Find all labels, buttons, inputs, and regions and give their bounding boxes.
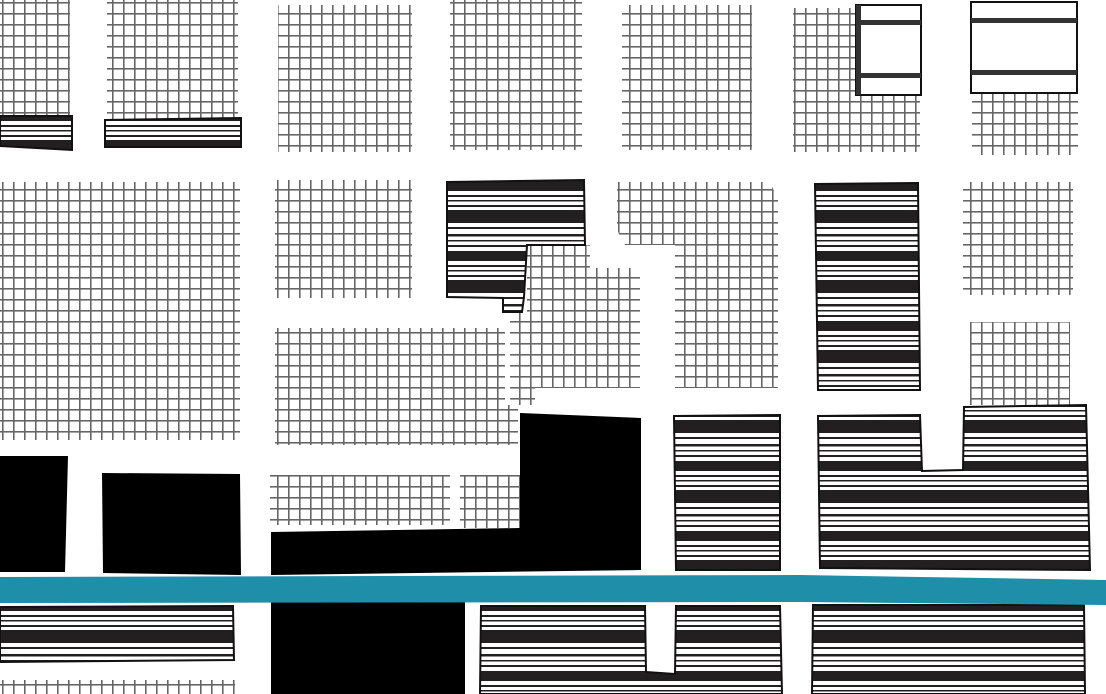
river xyxy=(0,575,1106,605)
top-right outlined buildings xyxy=(856,2,1077,95)
solid black buildings xyxy=(0,413,641,694)
